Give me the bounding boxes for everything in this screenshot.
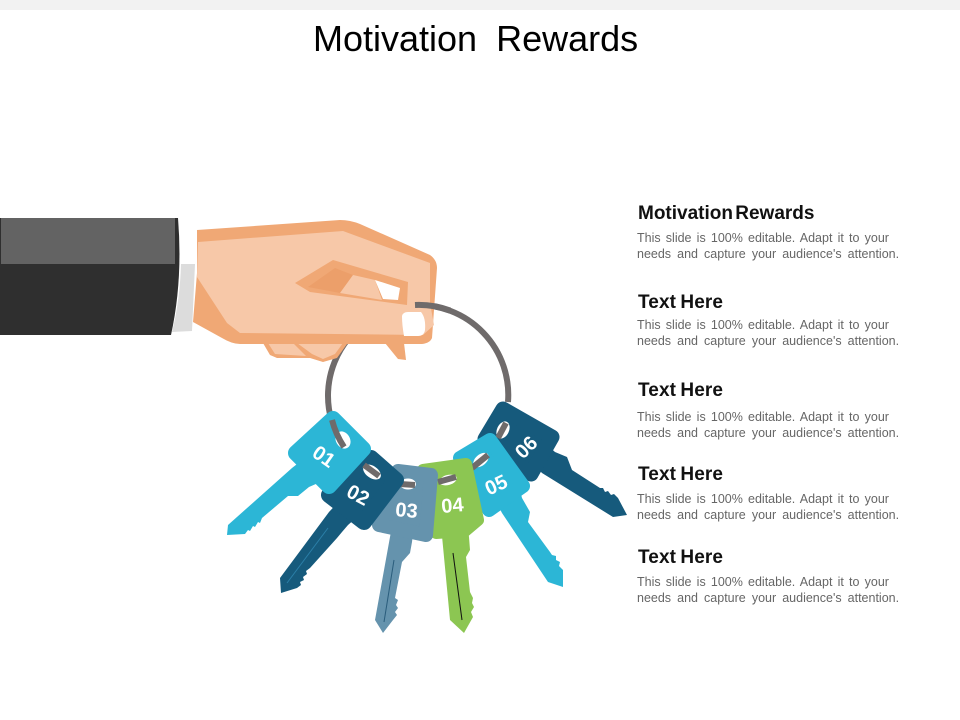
text block: Motivation Rewards: needs and capture your audience's attention. (637, 247, 899, 261)
key 02: 02 (343, 481, 373, 511)
text block: item 2: This slide is 100% editable. Adapt it to your (637, 318, 889, 332)
key ring (328, 305, 508, 447)
shirt cuff (172, 264, 195, 332)
text block: item 2 (637, 292, 899, 348)
text block: Motivation Rewards (637, 203, 899, 261)
text block: item 4: Text Here (638, 464, 723, 485)
key 01: 01 (308, 442, 339, 472)
text block: item 4: needs and capture your audience's attention. (637, 508, 899, 522)
key 04 (423, 464, 478, 633)
text block: Motivation Rewards: This slide is 100% editable. Adapt it to your (637, 231, 889, 245)
text block: item 2: Text Here (638, 292, 723, 313)
key 04: 04 (440, 494, 465, 518)
key 05 (460, 440, 563, 587)
key 05: 05 (482, 471, 511, 500)
jacket sleeve (0, 218, 179, 335)
text block: Motivation Rewards: Motivation Rewards (638, 203, 814, 224)
key 06: 06 (511, 432, 542, 463)
text block: item 3: Text Here (638, 380, 723, 401)
text block: item 5: This slide is 100% editable. Adapt it to your (637, 575, 889, 589)
hand (193, 220, 450, 362)
text block: item 4: This slide is 100% editable. Adapt it to your (637, 492, 889, 506)
text block: item 5: needs and capture your audience's attention. (637, 591, 899, 605)
text block: item 5 (637, 547, 899, 605)
key 01 (227, 419, 363, 535)
key 02 (280, 458, 396, 593)
text block: item 3: This slide is 100% editable. Adapt it to your (637, 410, 889, 424)
key 03 (375, 471, 431, 633)
text block: item 4 (637, 464, 899, 522)
title: Motivation Rewards (313, 18, 638, 59)
text block: item 3 (637, 380, 899, 440)
key 03: 03 (394, 499, 419, 523)
illustration: hand holding key ring (0, 218, 627, 633)
key 06 (485, 409, 627, 517)
text block: item 5: Text Here (638, 547, 723, 568)
text block: item 3: needs and capture your audience's attention. (637, 426, 899, 440)
text block: item 2: needs and capture your audience's attention. (637, 334, 899, 348)
